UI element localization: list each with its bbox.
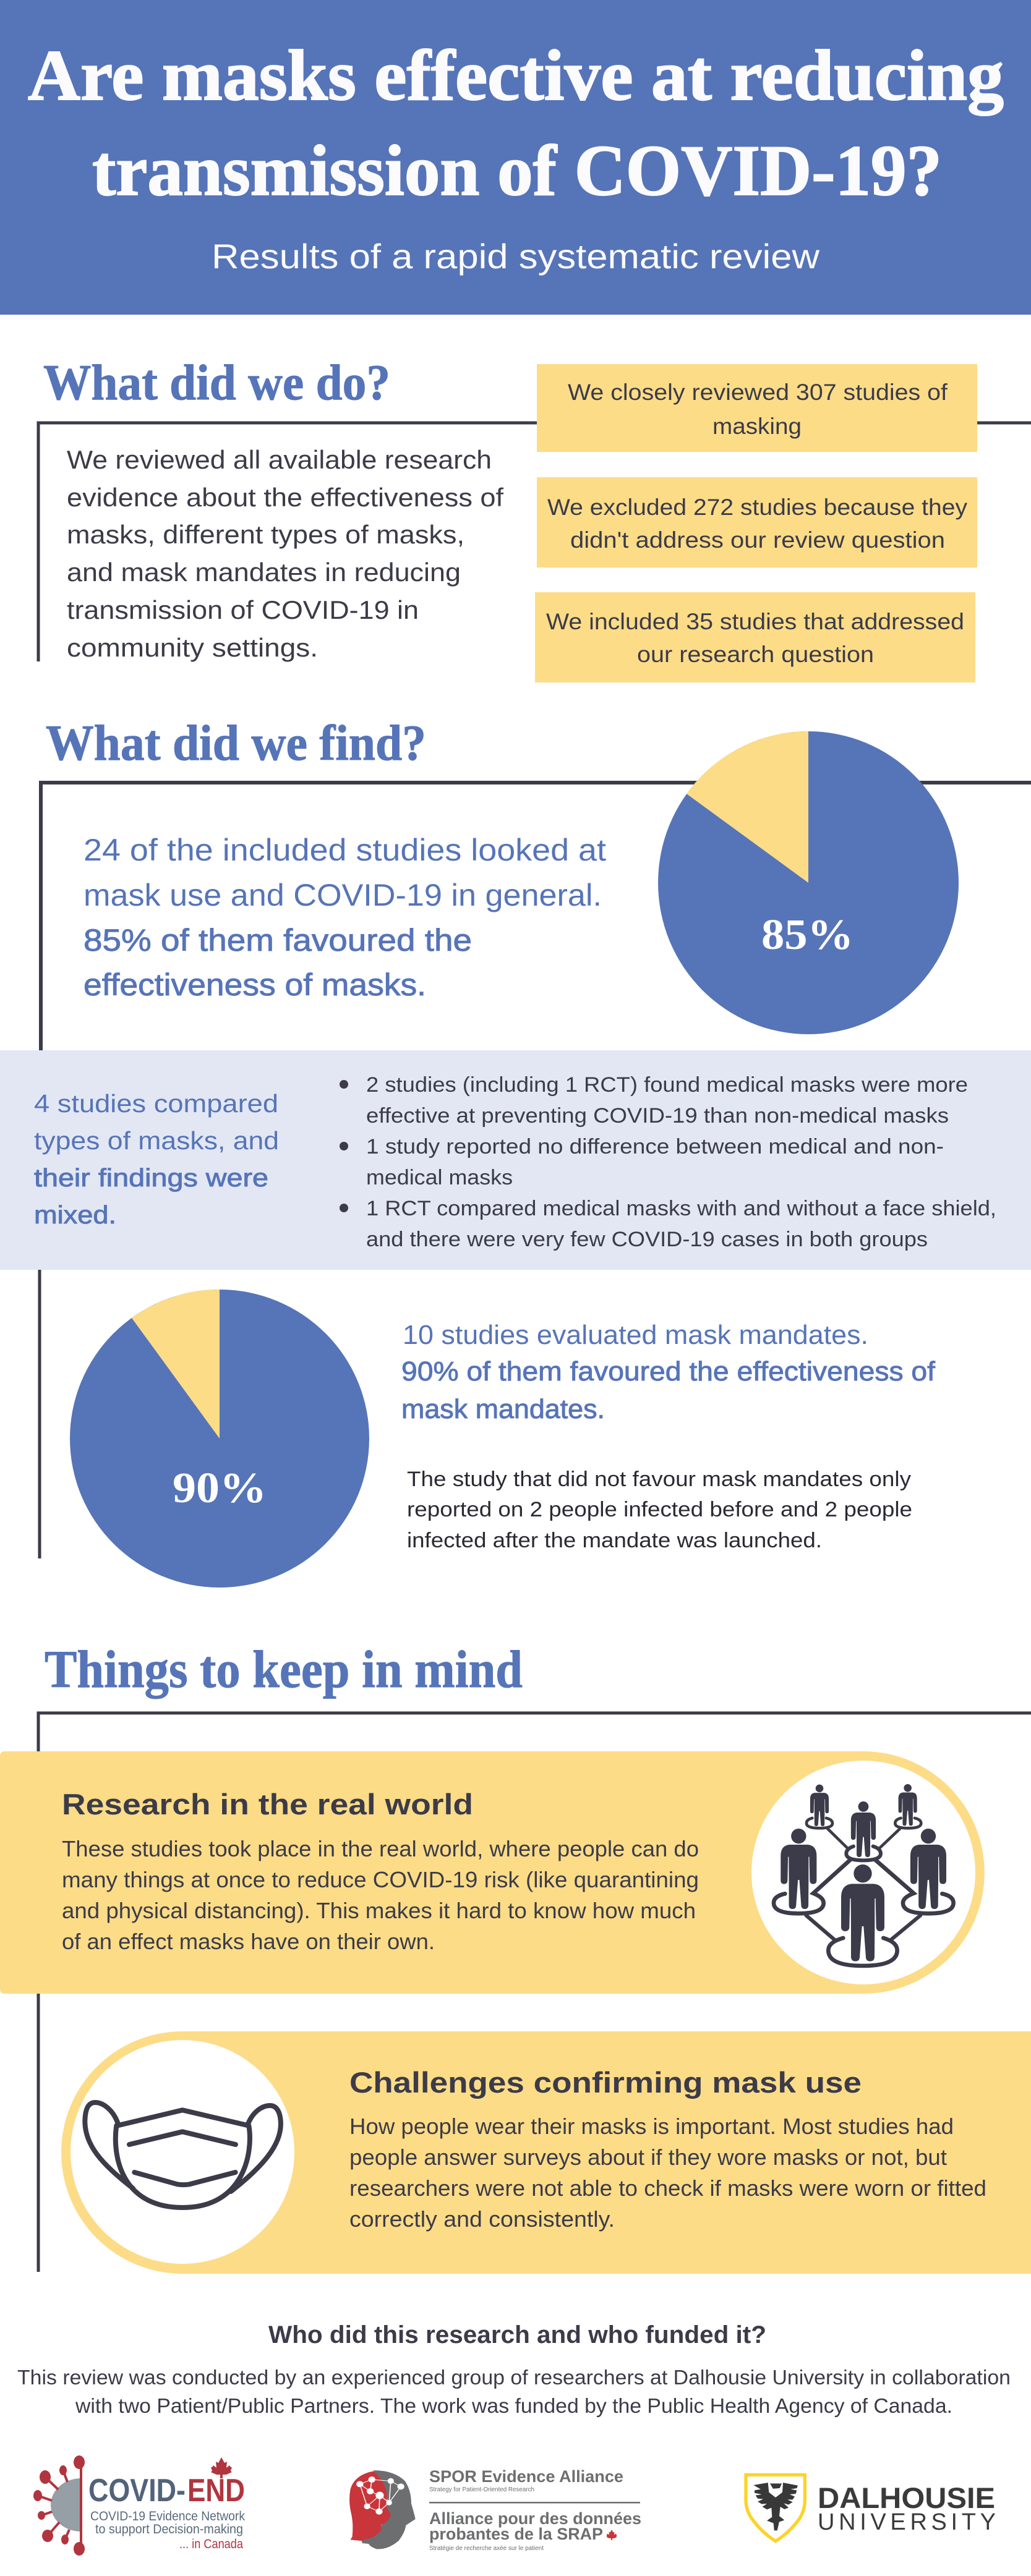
text block: 4 studies: their findings were: [34, 1163, 268, 1192]
text block: mandate note: The study that did not favour mask mandates only: [407, 1468, 911, 1491]
section: things to keep in mind: [0, 1639, 1031, 2274]
logo: COVID-END: ... in Canada: [179, 2537, 243, 2551]
bracket line: [38, 423, 1031, 661]
left rule: [38, 1270, 41, 1558]
text block: 24 studies: 24 of the included studies looked at: [83, 833, 606, 867]
section: who did this research: [17, 2321, 1011, 2417]
text block: real world: [62, 1836, 699, 1954]
text block: challenges: people answer surveys about if they wore masks or not, but: [349, 2145, 947, 2170]
callout: 35 included: We included 35 studies that addressed: [546, 609, 964, 634]
callout: 272 excluded: [537, 477, 977, 567]
text block: 4 studies: mixed.: [34, 1201, 116, 1229]
heading: who did this research: Who did this research and who funded it?: [268, 2321, 766, 2349]
text block: real world: These studies took place in the real world, where people can do: [62, 1836, 699, 1861]
logo: COVID-END: to support Decision-making: [95, 2522, 243, 2536]
text block: credits: [17, 2366, 1011, 2417]
callout: 272 excluded: didn't address our review question: [570, 527, 945, 553]
logo: SPOR Evidence Alliance: Strategy for Patient-Oriented Research: [429, 2486, 534, 2493]
callout: 307 reviewed: We closely reviewed 307 studies of: [568, 380, 948, 405]
bullet list: 1 RCT compared medical masks with and without a face shield,: [366, 1197, 996, 1220]
title: Are masks effective at reducing: [28, 36, 1004, 116]
heading: what did we find: What did we find?: [46, 715, 426, 771]
section: what did we do: [38, 354, 1031, 682]
pie chart: 85%: 85%: [761, 911, 853, 959]
logo: Dalhousie University: DALHOUSIE: [818, 2481, 995, 2514]
text block: what we did: transmission of COVID-19 in: [67, 595, 419, 624]
panel: research in the real world: [0, 1751, 985, 1994]
text block: mandate note: infected after the mandate was launched.: [407, 1529, 822, 1552]
text block: 4 studies: 4 studies compared: [34, 1089, 278, 1118]
logo: SPOR Evidence Alliance: probantes de la SRAP: [429, 2525, 603, 2543]
logo: SPOR Evidence Alliance: Alliance pour des données: [429, 2509, 641, 2528]
logo: Dalhousie University: UNIVERSITY: [818, 2509, 996, 2535]
bracket line: [38, 1713, 1031, 2272]
text block: 10 studies: 10 studies evaluated mask mandates.: [403, 1320, 868, 1350]
text block: 4 studies: [34, 1089, 279, 1229]
icon: face mask: [85, 2102, 281, 2208]
text block: 24 studies: mask use and COVID-19 in general.: [83, 878, 602, 912]
text block: challenges: researchers were not able to check if masks were worn or fitted: [349, 2175, 986, 2201]
pie chart: 90%: 90%: [173, 1464, 267, 1512]
panel: types of masks: [0, 1050, 1031, 1270]
text block: what we did: community settings.: [67, 633, 318, 662]
text block: mandate note: reported on 2 people infected before and 2 people: [407, 1498, 912, 1521]
pie chart: 90%: [70, 1290, 369, 1588]
heading: what did we do: What did we do?: [43, 354, 390, 410]
title: [28, 36, 1004, 211]
text block: credits: This review was conducted by an experienced group of researchers at Dalhousie University in collaboration: [17, 2366, 1011, 2389]
logo: COVID-END: [33, 2455, 245, 2556]
heading: research in the real world: Research in the real world: [62, 1788, 473, 1821]
text block: challenges: How people wear their masks is important. Most studies had: [349, 2114, 954, 2139]
text block: what we did: We reviewed all available research: [67, 445, 492, 474]
heading: challenges confirming mask use: Challenges confirming mask use: [349, 2066, 862, 2099]
bullet list: and there were very few COVID-19 cases in both groups: [366, 1228, 928, 1251]
logo: SPOR Evidence Alliance: [349, 2467, 641, 2552]
logo: SPOR Evidence Alliance: SPOR Evidence Alliance: [429, 2467, 623, 2486]
text block: what we did: masks, different types of masks,: [67, 520, 464, 549]
text block: 10 studies: [401, 1320, 936, 1424]
pie chart: 85%: [658, 731, 959, 1034]
bullet list: 2 studies (including 1 RCT) found medical masks were more: [366, 1073, 968, 1097]
text block: 24 studies: [83, 833, 606, 1002]
callout: 35 included: [535, 592, 975, 682]
subtitle: Results of a rapid systematic review: [212, 237, 820, 276]
text block: what we did: and mask mandates in reducing: [67, 558, 461, 587]
bullet list: [340, 1073, 996, 1251]
text block: 10 studies: 90% of them favoured the effectiveness of: [401, 1356, 936, 1387]
text block: 24 studies: 85% of them favoured the: [83, 923, 472, 958]
logo: SPOR Evidence Alliance: Stratégie de recherche axée sur le patient: [429, 2545, 544, 2552]
text block: credits: with two Patient/Public Partners. The work was funded by the Public Health Agency of Canada.: [75, 2394, 952, 2417]
callout: 35 included: our research question: [637, 642, 874, 667]
text block: challenges: correctly and consistently.: [349, 2206, 615, 2232]
text block: 4 studies: types of masks, and: [34, 1126, 279, 1155]
panel: challenges confirming mask use: [61, 2031, 1031, 2274]
section: what did we find: [0, 715, 1031, 1588]
text block: 10 studies: mask mandates.: [401, 1394, 605, 1424]
logo: Dalhousie University: [746, 2475, 996, 2541]
text block: what we did: evidence about the effectiveness of: [67, 483, 503, 512]
callout: 307 reviewed: masking: [712, 414, 802, 439]
bracket line: [41, 783, 1031, 1050]
text block: challenges: [349, 2114, 986, 2232]
heading: things to keep in mind: Things to keep in mind: [45, 1639, 523, 1699]
text block: 24 studies: effectiveness of masks.: [83, 967, 426, 1002]
callout: 307 reviewed: [537, 364, 977, 452]
text block: mandate note: [407, 1468, 912, 1552]
callout: 272 excluded: We excluded 272 studies because they: [547, 495, 968, 520]
logo: COVID-END: COVID-: [88, 2473, 186, 2509]
bullet list: 1 study reported no difference between medical and non-: [366, 1135, 944, 1158]
bullet list: effective at preventing COVID-19 than non-medical masks: [366, 1104, 949, 1128]
text block: real world: of an effect masks have on their own.: [62, 1929, 435, 1954]
text block: what we did: [67, 445, 503, 662]
bullet list: medical masks: [366, 1166, 513, 1189]
text block: real world: many things at once to reduce COVID-19 risk (like quarantining: [62, 1867, 699, 1892]
icon: network of people: [774, 1784, 954, 1966]
logo: COVID-END: COVID-19 Evidence Network: [90, 2509, 245, 2523]
header banner: [0, 0, 1031, 315]
logo: COVID-END: END: [187, 2473, 245, 2509]
title: transmission of COVID-19?: [92, 131, 942, 211]
text block: real world: and physical distancing). This makes it hard to know how much: [62, 1898, 696, 1923]
